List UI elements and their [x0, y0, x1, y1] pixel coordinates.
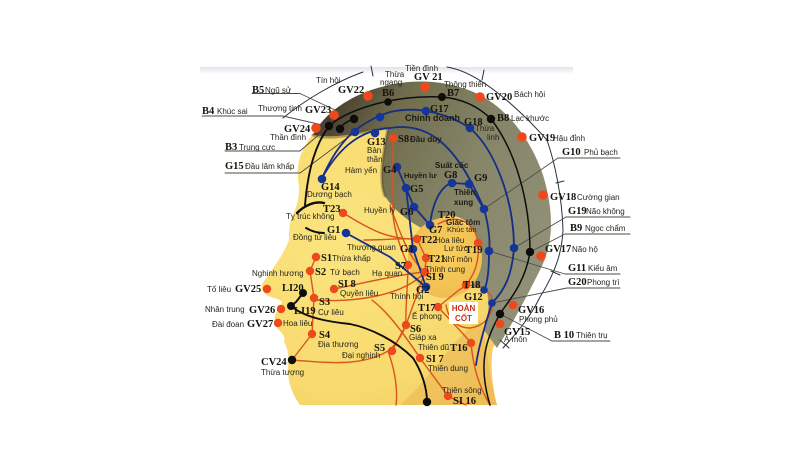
- labels: nose, mouth and chin: SI 8: [338, 279, 356, 290]
- labels: temple: G6: [400, 207, 413, 218]
- labels: temple: G8: [444, 170, 457, 181]
- callout: Hoan Cot: [449, 302, 478, 324]
- labels: temple: [286, 137, 487, 252]
- labels: right side: G11: [568, 263, 586, 274]
- labels: ear: Ế phong: [412, 311, 442, 321]
- labels: nose, mouth and chin: Quyền liêu: [340, 289, 378, 298]
- labels: jaw and neck: S6: [410, 324, 421, 335]
- labels: ear: Lư tức: [444, 244, 468, 253]
- labels: right side: G10: [562, 147, 581, 158]
- labels: right side: Ngọc chẩm: [585, 224, 626, 233]
- labels: temple: G9: [474, 173, 487, 184]
- labels: jaw and neck: [409, 305, 558, 407]
- labels: nose, mouth and chin: Hoa liêu: [283, 319, 312, 328]
- labels: jaw and neck: GV15: [504, 327, 530, 338]
- labels: upper left: Khúc sai: [217, 107, 248, 116]
- labels: crown: [380, 64, 585, 145]
- labels: ear: Khúc tân: [447, 225, 477, 234]
- labels: crown: Thừa: [385, 70, 405, 79]
- labels: right side: GV17: [545, 244, 571, 255]
- labels: nose, mouth and chin: S2: [315, 267, 326, 278]
- labels: nose, mouth and chin: Địa thương: [318, 340, 358, 349]
- labels: nose, mouth and chin: Tứ bạch: [330, 268, 360, 277]
- hair: [313, 81, 551, 348]
- labels: right side: B 10: [554, 330, 574, 341]
- labels: upper left: B4: [202, 106, 215, 117]
- labels: jaw and neck: Thiên dũ: [418, 343, 449, 352]
- labels: ear: Thính hội: [390, 292, 424, 301]
- labels: temple: Thiên: [454, 188, 475, 197]
- labels: jaw and neck: Á môn: [504, 335, 527, 344]
- labels: nose, mouth and chin: S4: [319, 330, 331, 341]
- labels: ear: Thính cung: [425, 265, 465, 274]
- labels: upper left: GV24: [284, 124, 311, 135]
- blue acupoints: [318, 107, 518, 307]
- labels: jaw and neck: SI 16: [453, 396, 476, 407]
- labels: nose, mouth and chin: Thừa khấp: [332, 254, 371, 263]
- labels: nose, mouth and chin: LI20: [282, 283, 304, 294]
- thick black meridians and facial features: [291, 126, 427, 402]
- callout: Hoan Cot: CỐT: [455, 313, 472, 323]
- labels: ear: G3: [400, 244, 413, 255]
- labels: right side: Não không: [586, 207, 625, 216]
- labels: upper left: GV22: [338, 85, 364, 96]
- labels: temple: G4: [383, 165, 397, 176]
- labels: right side: Thiên trụ: [576, 331, 608, 340]
- labels: crown: Thừa: [475, 124, 495, 133]
- labels: ear: S7: [395, 261, 406, 272]
- labels: ear: T22: [420, 235, 438, 246]
- labels: crown: G17: [430, 104, 449, 115]
- black meridian line: [329, 97, 530, 405]
- labels: crown: GV 21: [414, 72, 443, 83]
- labels: upper left: [202, 76, 364, 172]
- labels: temple: Hàm yến: [345, 166, 377, 175]
- labels: nose, mouth and chin: LI19: [294, 306, 316, 317]
- hairline shadow: [313, 128, 388, 196]
- red acupoints: [263, 82, 548, 400]
- labels: nose, mouth and chin: Thừa tượng: [261, 368, 304, 377]
- callout: Hoan Cot: HOÀN: [452, 304, 475, 313]
- labels: upper left: Ngũ sử: [265, 86, 292, 95]
- labels: right side: Cường gian: [577, 193, 620, 202]
- labels: nose, mouth and chin: GV25: [235, 284, 261, 295]
- labels: ear: T20: [438, 210, 456, 221]
- labels: upper left: G15: [225, 161, 244, 172]
- top paper band: [200, 67, 573, 74]
- labels: crown: Hậu đỉnh: [553, 134, 585, 143]
- labels: upper left: B5: [252, 85, 264, 96]
- labels: crown: B8: [497, 113, 509, 124]
- labels: nose, mouth and chin: Cự liêu: [318, 308, 344, 317]
- labels: nose, mouth and chin: [205, 253, 385, 377]
- labels: nose, mouth and chin: Đài đoan: [212, 320, 244, 329]
- labels: temple: Dương bạch: [307, 190, 352, 199]
- labels: right side: B9: [570, 223, 582, 234]
- labels: nose, mouth and chin: GV27: [247, 319, 273, 330]
- labels: nose, mouth and chin: GV26: [249, 305, 275, 316]
- labels: crown: Tiền đình: [405, 64, 438, 73]
- labels: ear: Giác tôm: [446, 218, 480, 227]
- neck shading: [400, 320, 497, 405]
- labels: jaw and neck: T16: [450, 343, 468, 354]
- labels: nose, mouth and chin: CV24: [261, 357, 287, 368]
- labels: upper left: Thượng tinh: [258, 104, 302, 113]
- labels: temple: Huyền lư: [404, 171, 437, 180]
- labels: ear: T18: [463, 280, 481, 291]
- labels: temple: Suất cốc: [435, 161, 469, 170]
- labels: crown: Đầu duy: [410, 135, 442, 144]
- labels: temple: G13: [367, 137, 386, 148]
- labels: nose, mouth and chin: S3: [319, 297, 330, 308]
- labels: crown: B7: [447, 88, 459, 99]
- labels: ear: Hòa liêu: [435, 236, 464, 245]
- labels: right side: Phủ bạch: [584, 148, 618, 157]
- labels: temple: G5: [410, 184, 423, 195]
- labels: ear: T21: [428, 254, 446, 265]
- labels: crown: GV19: [529, 133, 555, 144]
- labels: temple: G1: [327, 225, 340, 236]
- labels: crown: Thông thiên: [444, 80, 486, 89]
- labels: ear: T17: [418, 303, 436, 314]
- head skin silhouette: [262, 100, 520, 405]
- labels: nose, mouth and chin: Nghinh hương: [252, 269, 304, 278]
- labels: crown: GV20: [486, 92, 512, 103]
- labels: jaw and neck: Phong phủ: [519, 315, 558, 324]
- labels: upper left: Đầu lâm khấp: [245, 162, 295, 171]
- labels: ear: Hạ quan: [372, 269, 402, 278]
- labels: jaw and neck: SI 7: [426, 354, 444, 365]
- labels: right side: G19: [568, 206, 587, 217]
- labels: upper left: Thần đình: [270, 133, 306, 142]
- outer graduated arc: [283, 66, 564, 348]
- labels: ear: G12: [464, 292, 483, 303]
- leader lines: [202, 94, 630, 341]
- labels: crown: Bách hội: [514, 90, 545, 99]
- labels: ear: Nhĩ môn: [442, 255, 472, 264]
- labels: ear: G2: [416, 285, 429, 296]
- labels: upper left: Tín hội: [316, 76, 341, 85]
- labels: crown: ngang: [380, 78, 402, 87]
- labels: temple: thần: [367, 155, 383, 164]
- labels: temple: Huyền lý: [364, 206, 395, 215]
- labels: crown: linh: [487, 133, 499, 142]
- labels: nose, mouth and chin: S1: [321, 253, 332, 264]
- labels: crown: Lạc khước: [511, 114, 549, 123]
- labels: right side: GV18: [550, 192, 576, 203]
- blue meridian lines: [322, 110, 514, 365]
- labels: temple: Bản: [367, 146, 381, 155]
- labels: temple: Thượng quan: [347, 243, 396, 252]
- black acupoints: [287, 93, 534, 406]
- labels: crown: B6: [382, 88, 394, 99]
- labels: upper left: Trung cực: [239, 143, 275, 152]
- labels: ear: T19: [465, 245, 483, 256]
- ear highlight: [408, 218, 482, 298]
- labels: temple: Đồng tử liêu: [293, 233, 337, 242]
- labels: right side: G20: [568, 277, 587, 288]
- orange meridian lines: [292, 138, 492, 405]
- labels: ear: SI 9: [426, 272, 444, 283]
- labels: jaw and neck: GV16: [518, 305, 544, 316]
- labels: nose, mouth and chin: Tố liêu: [207, 285, 231, 294]
- labels: ear: [372, 210, 483, 321]
- labels: nose, mouth and chin: S5: [374, 343, 385, 354]
- labels: right side: Phong trì: [587, 278, 619, 287]
- labels: crown: Chính doanh: [405, 113, 460, 123]
- labels: upper left: GV23: [305, 105, 331, 116]
- labels: temple: xung: [454, 198, 473, 207]
- labels: nose, mouth and chin: Nhân trung: [205, 305, 245, 314]
- labels: temple: G14: [321, 182, 340, 193]
- labels: crown: G18: [464, 117, 483, 128]
- labels: ear: G7: [429, 225, 442, 236]
- labels: right side: Não hộ: [572, 245, 598, 254]
- labels: right side: [545, 147, 626, 341]
- labels: jaw and neck: Giáp xa: [409, 333, 437, 342]
- labels: crown: S8: [398, 134, 409, 145]
- labels: temple: T23: [323, 204, 341, 215]
- labels: upper left: B3: [225, 142, 237, 153]
- labels: temple: Tỵ trúc không: [286, 212, 334, 221]
- labels: jaw and neck: Thiên dung: [428, 364, 468, 373]
- labels: jaw and neck: Thiên sông: [442, 386, 482, 395]
- labels: right side: Kiểu âm: [588, 264, 618, 273]
- labels: nose, mouth and chin: Đại nghinh: [342, 351, 380, 360]
